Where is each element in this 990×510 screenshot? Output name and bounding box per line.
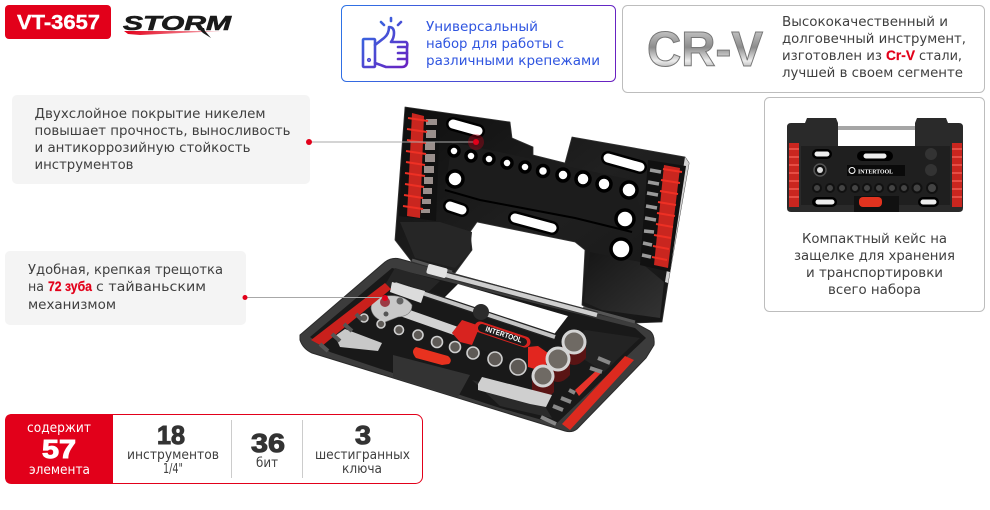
callout: ratchet: механизмом <box>28 298 116 313</box>
callout: Cr-V steel <box>622 6 984 92</box>
stat: hex keys: 3 <box>355 420 371 450</box>
case base <box>300 258 654 432</box>
callout: nickel coating: инструментов <box>34 158 134 173</box>
stat: tools: 18 <box>157 420 185 450</box>
stat: tools: 1/4" <box>163 462 183 477</box>
handle with red grip <box>452 320 548 372</box>
callout: ratchet: с тайваньским <box>96 280 206 295</box>
pointer: nickel coating <box>306 134 484 150</box>
callout: ratchet: на <box>28 280 44 295</box>
icon: CR-V logo: CR-V <box>647 23 763 77</box>
brand logo: Storm: STORM <box>123 13 233 35</box>
open case product photo <box>300 107 689 432</box>
callout: Cr-V steel: изготовлен из <box>782 49 882 64</box>
brand logo: Storm <box>123 13 233 38</box>
ratchet <box>371 296 456 331</box>
small extension <box>478 377 552 407</box>
callout: universal set: Универсальный <box>426 20 538 35</box>
closed case photo <box>787 118 963 212</box>
callout: nickel coating <box>12 95 310 184</box>
knob <box>473 304 489 320</box>
lid hinges <box>412 260 635 322</box>
stat: hex keys <box>315 420 410 477</box>
extension bars <box>390 264 597 337</box>
total count block: содержит <box>27 421 91 436</box>
stat: bits: бит <box>256 456 278 471</box>
total count block <box>5 414 113 484</box>
callout: compact case: Компактный кейс на <box>802 232 947 247</box>
callout: nickel coating: повышает прочность, выносливость <box>34 124 290 139</box>
callout: nickel coating: и антикоррозийную стойкость <box>34 141 250 156</box>
total count block: 57 <box>42 434 76 464</box>
callout: Cr-V steel: Cr-V <box>886 48 915 63</box>
model badge <box>5 5 111 39</box>
red latch <box>413 347 451 365</box>
callout: nickel coating: Двухслойное покрытие никелем <box>34 107 266 122</box>
callout: universal set: набор для работы с <box>426 37 564 52</box>
callout: compact case: и транспортировки <box>806 266 943 281</box>
contents summary panel <box>5 414 422 484</box>
right bit holder <box>640 160 686 272</box>
left bit holder <box>399 112 440 221</box>
callout: compact case <box>764 98 984 312</box>
stat: hex keys: ключа <box>342 462 382 477</box>
stat: hex keys: шестигранных <box>315 448 410 463</box>
case lid <box>395 107 689 323</box>
right bit strip <box>541 356 634 430</box>
window background <box>442 284 568 337</box>
callout: universal set: различными крепежами <box>426 54 600 69</box>
handle with red grip: INTERTOOL <box>484 324 524 345</box>
universal joint <box>335 329 382 351</box>
callout: Cr-V steel: Высококачественный и <box>782 15 948 30</box>
pointer: ratchet <box>242 295 388 301</box>
icon: thumbs up <box>363 18 407 67</box>
model badge: VT-3657 <box>17 12 100 34</box>
callout: universal set <box>342 6 616 82</box>
lid socket holes <box>447 146 637 259</box>
closed case photo: INTERTOOL <box>858 168 894 176</box>
large sockets <box>532 331 586 398</box>
callout: Cr-V steel: стали, <box>919 49 962 64</box>
callout: compact case: защелке для хранения <box>794 249 955 264</box>
small sockets <box>360 314 526 375</box>
lid slots <box>450 124 640 228</box>
left bit strip <box>311 283 391 351</box>
stat: bits <box>251 428 285 471</box>
callout: ratchet <box>5 251 246 325</box>
callout: compact case: всего набора <box>828 283 921 298</box>
total count block: элемента <box>29 463 90 478</box>
callout: ratchet: Удобная, крепкая трещотка <box>28 263 223 278</box>
stat: tools <box>127 420 219 477</box>
stat: bits: 36 <box>251 428 285 458</box>
callout: Cr-V steel: долговечный инструмент, <box>782 32 966 47</box>
callout: Cr-V steel: лучшей в своем сегменте <box>782 66 963 81</box>
stat: tools: инструментов <box>127 448 219 463</box>
callout: ratchet: 72 зуба <box>48 279 92 294</box>
